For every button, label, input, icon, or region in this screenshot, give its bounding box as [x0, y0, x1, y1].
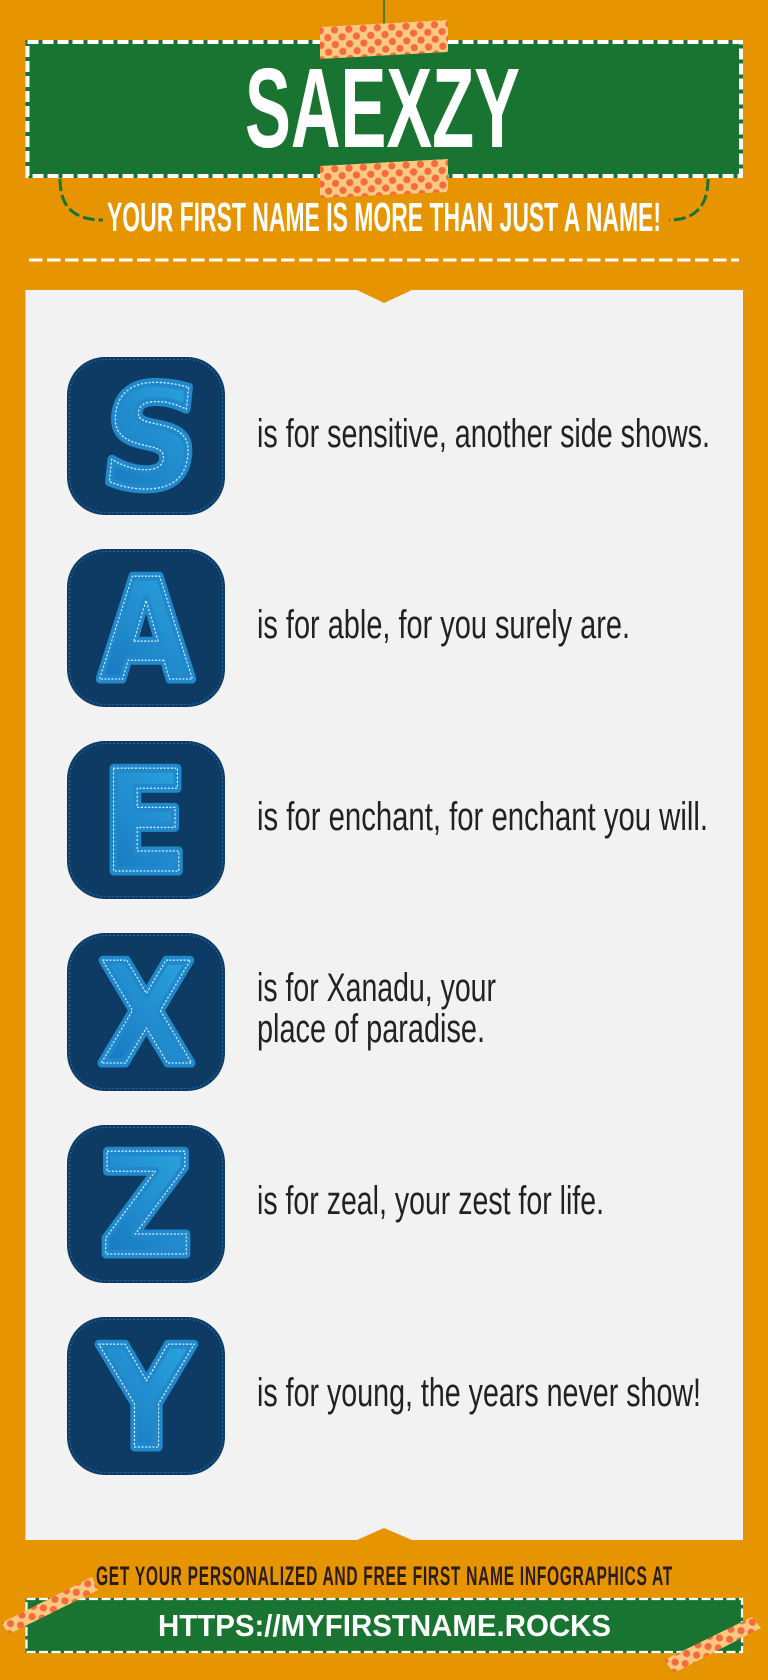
tape: footer left	[2, 1577, 98, 1634]
footer banner	[26, 1598, 743, 1653]
row: E	[67, 741, 708, 905]
tape: top	[320, 20, 448, 59]
icon: letter A	[67, 549, 225, 713]
icon: letter Y: Y	[98, 1317, 195, 1481]
icon: letter X: X	[99, 933, 194, 1097]
icon: letter A: A	[99, 549, 193, 713]
tape: bottom of banner	[320, 159, 448, 198]
icon: letter E: E	[102, 741, 188, 905]
row: A	[67, 549, 630, 713]
row: Y	[67, 1317, 701, 1481]
title: SAEXZY	[245, 45, 520, 171]
tape: footer right	[664, 1617, 761, 1673]
icon: letter Z: Z	[100, 1124, 192, 1288]
row: S	[67, 357, 710, 521]
url: HTTPS://MYFIRSTNAME.ROCKS	[158, 1609, 611, 1643]
text: A: is for able, for you surely are.	[257, 603, 630, 647]
panel: letters	[26, 290, 743, 1540]
icon: letter X	[67, 933, 225, 1097]
icon: hanging thread	[383, 0, 385, 24]
header banner	[26, 40, 743, 178]
icon: letter S: S	[95, 357, 208, 521]
text: X: is for Xanadu, your	[257, 966, 496, 1010]
connector: left stitched curve	[60, 179, 103, 220]
icon: letter A: A	[99, 549, 193, 713]
icon: letter Y: Y	[98, 1317, 195, 1481]
row: Z	[67, 1124, 604, 1288]
icon: letter E: E	[102, 741, 188, 905]
icon: letter S: S	[95, 357, 208, 521]
icon: letter E	[67, 741, 225, 905]
row: X	[67, 933, 496, 1097]
connector: right stitched curve	[669, 179, 708, 220]
text: X	[257, 966, 496, 1051]
icon: letter Z	[67, 1124, 225, 1288]
icon: letter Z: Z	[100, 1124, 192, 1288]
text: Z: is for zeal, your zest for life.	[257, 1179, 604, 1223]
icon: letter X: X	[99, 933, 194, 1097]
icon: letter Y	[67, 1317, 225, 1481]
text: X: place of paradise.	[257, 1007, 485, 1051]
